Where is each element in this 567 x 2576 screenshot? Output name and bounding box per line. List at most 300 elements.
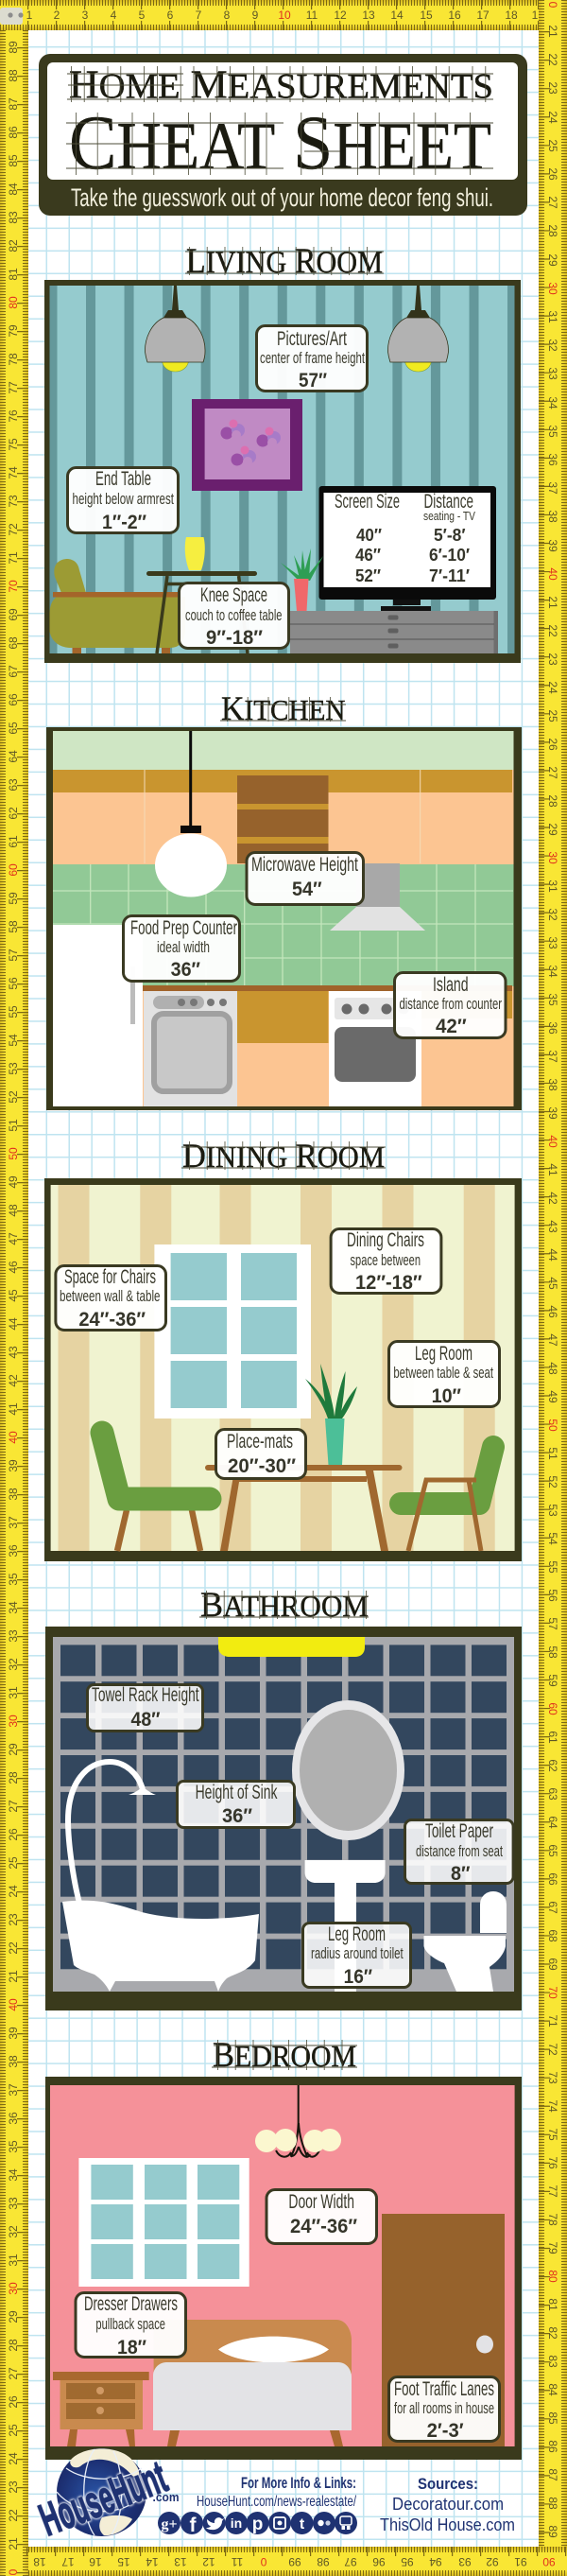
ruler: right: 28 bbox=[546, 794, 559, 808]
ruler: right: 23 bbox=[546, 653, 559, 666]
callout: place-mats: Place-mats bbox=[227, 1431, 293, 1453]
callout: height of sink bbox=[178, 1782, 295, 1827]
ruler: left: 28 bbox=[7, 2339, 20, 2352]
ruler: right: 40 bbox=[546, 1135, 559, 1148]
text: sources: Decoratour.com bbox=[392, 2495, 504, 2514]
ruler: right: 37 bbox=[546, 1050, 559, 1063]
callout: toilet paper: Toilet Paper bbox=[425, 1820, 493, 1842]
callout: space for chairs: Space for Chairs bbox=[64, 1266, 156, 1288]
ruler: top: 1 bbox=[26, 9, 33, 22]
callout: microwave height: Microwave Height bbox=[251, 854, 358, 876]
ruler: right: 21 bbox=[546, 596, 559, 609]
tv with screen size table: 40″ bbox=[356, 526, 382, 545]
ruler: top: 12 bbox=[334, 9, 347, 22]
ruler: left: 46 bbox=[7, 1261, 20, 1274]
sink bbox=[305, 1860, 386, 1992]
ruler: right: 41 bbox=[546, 1163, 559, 1176]
ruler: bottom: 93 bbox=[458, 2555, 472, 2568]
callout: dresser drawers: pullback space bbox=[95, 2315, 165, 2333]
ruler: left: 42 bbox=[7, 1374, 20, 1387]
ruler: left: 89 bbox=[7, 41, 20, 54]
ruler: left: 68 bbox=[7, 636, 20, 650]
ruler: left: 79 bbox=[7, 324, 20, 338]
title banner bbox=[39, 54, 527, 216]
icon: twitter bbox=[202, 2512, 225, 2534]
callout: food prep counter bbox=[123, 915, 240, 982]
ruler: right: 30 bbox=[546, 851, 559, 864]
callout: island: Island bbox=[433, 974, 469, 996]
ruler: left: 80 bbox=[7, 296, 20, 309]
ruler: right: 38 bbox=[546, 510, 559, 523]
callout: knee space bbox=[180, 583, 289, 649]
callout: knee space: 9″-18″ bbox=[206, 627, 263, 649]
ruler: right: 0 bbox=[546, 2, 559, 9]
callout: towel rack height bbox=[87, 1684, 202, 1731]
title: Cheat Sheet: CHEAT SHEET bbox=[69, 99, 491, 185]
tv with screen size table: 7′-11′ bbox=[429, 566, 470, 585]
ruler: right: 33 bbox=[546, 367, 559, 380]
callout: door width: Door Width bbox=[288, 2191, 354, 2213]
ruler: left: 59 bbox=[7, 892, 20, 905]
ruler: right: 35 bbox=[546, 993, 559, 1006]
logo: HouseHunt globe bbox=[33, 2448, 180, 2546]
ruler: left: 76 bbox=[7, 409, 20, 423]
callout: end table: End Table bbox=[95, 468, 151, 490]
ruler: left: 37 bbox=[7, 1516, 20, 1529]
ruler: top: 18 bbox=[505, 9, 518, 22]
ruler: left: 35 bbox=[7, 1573, 20, 1586]
ruler: right: 22 bbox=[546, 624, 559, 637]
ruler: left: 67 bbox=[7, 665, 20, 678]
mirror bbox=[292, 1700, 404, 1840]
icon: facebook: f bbox=[189, 2515, 197, 2536]
ruler: right: 42 bbox=[546, 1192, 559, 1205]
callout: door width bbox=[266, 2190, 376, 2243]
ruler: top: 13 bbox=[362, 9, 375, 22]
ruler: left: 47 bbox=[7, 1232, 20, 1245]
right chair bbox=[401, 1447, 493, 1551]
ruler: right: 81 bbox=[546, 2298, 559, 2311]
ruler: bottom: 16 bbox=[89, 2555, 102, 2568]
callout: island: distance from counter bbox=[399, 995, 502, 1013]
ruler: top: 17 bbox=[476, 9, 490, 22]
callout: toilet paper: distance from seat bbox=[416, 1842, 503, 1860]
callout: end table: height below armrest bbox=[72, 490, 174, 508]
ruler: right: 68 bbox=[546, 1929, 559, 1942]
ceiling light bbox=[218, 1637, 365, 1657]
ruler: top: 6 bbox=[167, 9, 174, 22]
ruler: left: 60 bbox=[7, 863, 20, 877]
tv with screen size table: seating - TV bbox=[423, 509, 475, 523]
ruler: right: 45 bbox=[546, 1277, 559, 1290]
ruler: left: 85 bbox=[7, 154, 20, 167]
ruler: bottom: 11 bbox=[231, 2555, 243, 2568]
ruler: left: 83 bbox=[7, 211, 20, 224]
ruler: right: 34 bbox=[546, 965, 559, 978]
range hood bbox=[330, 863, 425, 931]
ruler: right: 57 bbox=[546, 1617, 559, 1630]
ruler: left: 55 bbox=[7, 1005, 20, 1018]
ruler: right: 72 bbox=[546, 2043, 559, 2056]
ruler: left: 25 bbox=[7, 2424, 20, 2437]
ruler: left: 36 bbox=[7, 2112, 20, 2125]
ruler: left: 32 bbox=[7, 1658, 20, 1671]
ruler: right: 49 bbox=[546, 1390, 559, 1403]
wordmark: .com: .com bbox=[153, 2490, 180, 2504]
callout: leg room: Leg Room bbox=[415, 1343, 472, 1365]
ruler: right: 39 bbox=[546, 1106, 559, 1120]
tv with screen size table: 46″ bbox=[355, 546, 381, 565]
icon: myspace bbox=[335, 2512, 357, 2534]
ruler: right: 26 bbox=[546, 167, 559, 181]
ruler: bottom: 94 bbox=[429, 2555, 442, 2568]
callout: pictures/art: Pictures/Art bbox=[277, 328, 347, 350]
ruler: right: 66 bbox=[546, 1872, 559, 1886]
ruler: right: 63 bbox=[546, 1787, 559, 1801]
ruler: top: 16 bbox=[448, 9, 461, 22]
callout: dresser drawers bbox=[76, 2292, 185, 2358]
ruler: right: 26 bbox=[546, 738, 559, 751]
ruler: right: 34 bbox=[546, 396, 559, 409]
icon: tumblr: t bbox=[300, 2516, 305, 2532]
stove bbox=[329, 991, 421, 1106]
ruler: top: 9 bbox=[252, 9, 259, 22]
ruler: left: 23 bbox=[7, 1913, 20, 1926]
ruler: left: 30 bbox=[7, 1714, 20, 1728]
panel: bathroom bbox=[45, 1627, 522, 2010]
callout: foot traffic lanes: 2′-3′ bbox=[427, 2420, 464, 2442]
callout: place-mats bbox=[215, 1430, 306, 1479]
ruler: left: 51 bbox=[7, 1119, 20, 1132]
ruler: left: 50 bbox=[7, 1147, 20, 1160]
panel: living room bbox=[44, 280, 521, 663]
callout: knee space: couch to coffee table bbox=[185, 606, 282, 624]
text: sources bbox=[380, 2475, 515, 2534]
left chair bbox=[102, 1433, 210, 1551]
heading: Living Room: LIVING ROOM bbox=[186, 242, 383, 281]
ruler: bottom: 92 bbox=[486, 2555, 499, 2568]
ruler: left: 25 bbox=[7, 1856, 20, 1870]
callout: food prep counter: Food Prep Counter bbox=[130, 917, 237, 939]
ruler: left: 0 bbox=[7, 2568, 20, 2575]
ruler: bottom: 12 bbox=[202, 2555, 215, 2568]
ruler: right: 33 bbox=[546, 936, 559, 949]
ruler: right: 80 bbox=[546, 2270, 559, 2283]
ruler: top: 2 bbox=[54, 9, 60, 22]
ruler: right: 43 bbox=[546, 1220, 559, 1233]
ruler: left: 70 bbox=[7, 580, 20, 593]
heading: Bedroom: BEDROOM bbox=[213, 2036, 356, 2075]
ruler: left: 54 bbox=[7, 1034, 20, 1047]
ruler: left: 81 bbox=[7, 268, 20, 281]
ruler: left: 71 bbox=[7, 551, 20, 565]
ruler: left: 34 bbox=[7, 1601, 20, 1614]
ruler: left: 65 bbox=[7, 722, 20, 735]
dining table bbox=[205, 1465, 403, 1551]
callout: end table: 1″-2″ bbox=[102, 512, 146, 533]
vase bbox=[185, 537, 205, 570]
callout: food prep counter: ideal width bbox=[157, 938, 210, 956]
ruler: left: 29 bbox=[7, 2310, 20, 2324]
tile backsplash bbox=[53, 864, 514, 986]
ruler: right: 44 bbox=[546, 1248, 559, 1262]
callout: microwave height: 54″ bbox=[292, 879, 322, 900]
ruler: left: 58 bbox=[7, 920, 20, 933]
coffee table bbox=[146, 571, 257, 653]
ruler: right: 37 bbox=[546, 481, 559, 495]
icon: facebook bbox=[180, 2512, 203, 2536]
ruler: left: 36 bbox=[7, 1544, 20, 1558]
ruler: right: 30 bbox=[546, 282, 559, 295]
tv with screen size table: Distance bbox=[423, 491, 473, 513]
icon: tumblr bbox=[291, 2512, 314, 2534]
callout: dining chairs: space between bbox=[350, 1251, 421, 1269]
ruler: left: 24 bbox=[7, 1885, 20, 1898]
wall cabinet with shelves bbox=[237, 775, 329, 863]
ruler: left: 43 bbox=[7, 1346, 20, 1359]
window bbox=[78, 2158, 249, 2287]
callout: height of sink: 36″ bbox=[222, 1805, 252, 1827]
ruler: right: 24 bbox=[546, 111, 559, 124]
icon: pendant lamp right bbox=[387, 286, 449, 372]
callout: leg room: 10″ bbox=[432, 1385, 461, 1407]
callout: end table bbox=[68, 467, 178, 533]
ruler: right: 29 bbox=[546, 253, 559, 267]
ruler: right: 71 bbox=[546, 2014, 559, 2028]
ruler: left: 39 bbox=[7, 1459, 20, 1472]
text: more info and links: HouseHunt.com/news-realestate/ bbox=[197, 2494, 356, 2510]
callout: leg room: between table & seat bbox=[393, 1364, 493, 1382]
door bbox=[382, 2214, 505, 2446]
ruler: right: 48 bbox=[546, 1362, 559, 1375]
callout: island bbox=[395, 972, 506, 1038]
ruler: left: 31 bbox=[7, 2254, 20, 2267]
callout: knee space: Knee Space bbox=[200, 584, 267, 606]
ruler: right: 21 bbox=[546, 25, 559, 38]
ruler: left: 24 bbox=[7, 2452, 20, 2465]
ruler: left: 75 bbox=[7, 438, 20, 451]
ruler: right: 32 bbox=[546, 908, 559, 921]
ruler: left: 29 bbox=[7, 1743, 20, 1756]
icon: google plus bbox=[158, 2512, 180, 2534]
ruler: right: 77 bbox=[546, 2184, 559, 2198]
callout: towel rack height: 48″ bbox=[130, 1709, 161, 1731]
ruler: left: 62 bbox=[7, 807, 20, 820]
callout: leg room: radius around toilet bbox=[311, 1944, 404, 1962]
callout: dining chairs: Dining Chairs bbox=[347, 1229, 424, 1251]
panel: bedroom bbox=[45, 2077, 522, 2460]
title: Home Measurements: HOME MEASUREMENTS bbox=[69, 64, 493, 108]
ruler: right: 70 bbox=[546, 1986, 559, 1999]
ruler: bottom: 98 bbox=[317, 2555, 330, 2568]
tv with screen size table: 52″ bbox=[355, 566, 381, 585]
callout: space for chairs: between wall & table bbox=[60, 1287, 161, 1305]
ruler: top: 10 bbox=[278, 9, 291, 22]
icon: pinterest: p bbox=[252, 2515, 263, 2534]
ruler: right: 28 bbox=[546, 224, 559, 237]
ruler: bottom: 18 bbox=[33, 2555, 46, 2568]
callout: dresser drawers: 18″ bbox=[117, 2337, 146, 2358]
ruler: left: 33 bbox=[7, 1629, 20, 1643]
tv with screen size table: Screen Size bbox=[335, 491, 400, 513]
ruler: bottom: 95 bbox=[401, 2555, 414, 2568]
text: sources: Sources: bbox=[418, 2475, 478, 2493]
ruler: left: 27 bbox=[7, 2367, 20, 2380]
callout: door width: 24″-36″ bbox=[290, 2216, 357, 2237]
ruler: right: 54 bbox=[546, 1532, 559, 1545]
ruler: left bbox=[0, 30, 28, 2576]
callout: dresser drawers: Dresser Drawers bbox=[84, 2293, 178, 2315]
framed art bbox=[192, 399, 302, 491]
callout: foot traffic lanes bbox=[389, 2377, 499, 2442]
bed bbox=[153, 2320, 352, 2446]
ruler: right: 84 bbox=[546, 2383, 559, 2396]
icon: linkedin: in bbox=[231, 2515, 242, 2531]
ruler: right: 79 bbox=[546, 2241, 559, 2254]
ruler: right: 89 bbox=[546, 2525, 559, 2538]
icon: google plus: g+ bbox=[161, 2516, 178, 2532]
ruler: left: 21 bbox=[7, 1970, 20, 1983]
ruler: left: 48 bbox=[7, 1204, 20, 1217]
ruler: bottom bbox=[26, 2547, 567, 2576]
ruler: right: 67 bbox=[546, 1901, 559, 1914]
ruler: left: 77 bbox=[7, 381, 20, 394]
icon: pendant lamp left bbox=[145, 286, 205, 372]
ruler: left: 28 bbox=[7, 1771, 20, 1784]
ruler: left: 22 bbox=[7, 2509, 20, 2522]
ruler: right: 31 bbox=[546, 310, 559, 323]
ruler: right: 87 bbox=[546, 2468, 559, 2481]
text: more info and links bbox=[197, 2474, 356, 2510]
callout: foot traffic lanes: for all rooms in house bbox=[394, 2399, 494, 2417]
callout: toilet paper: 8″ bbox=[451, 1863, 471, 1885]
ruler: right: 59 bbox=[546, 1674, 559, 1687]
ruler: top: 11 bbox=[306, 9, 318, 22]
ruler: left: 63 bbox=[7, 778, 20, 792]
ruler: right: 35 bbox=[546, 425, 559, 438]
callout: dining chairs: 12″-18″ bbox=[355, 1272, 422, 1294]
ruler: left: 26 bbox=[7, 2395, 20, 2409]
ruler: right: 75 bbox=[546, 2128, 559, 2141]
ruler: right: 83 bbox=[546, 2355, 559, 2368]
ruler: right: 47 bbox=[546, 1333, 559, 1347]
ruler: left: 35 bbox=[7, 2140, 20, 2153]
callout: towel rack height: Towel Rack Height bbox=[92, 1684, 199, 1706]
tv console bbox=[290, 611, 498, 653]
ruler: left: 88 bbox=[7, 69, 20, 82]
ruler: right: 23 bbox=[546, 81, 559, 95]
icon: instagram bbox=[268, 2512, 291, 2534]
ruler: right: 56 bbox=[546, 1589, 559, 1602]
bathtub and shower bbox=[62, 1762, 259, 1992]
ruler: left: 69 bbox=[7, 608, 20, 621]
ruler: left: 23 bbox=[7, 2480, 20, 2494]
ruler: bottom: 97 bbox=[344, 2555, 357, 2568]
ruler: left: 38 bbox=[7, 2055, 20, 2068]
ruler: top: 14 bbox=[390, 9, 404, 22]
icon: chandelier bbox=[255, 2085, 341, 2157]
ruler: left: 53 bbox=[7, 1062, 20, 1075]
ruler: top: 5 bbox=[139, 9, 146, 22]
icon: potted plant bbox=[281, 548, 323, 611]
ruler: left: 33 bbox=[7, 2197, 20, 2210]
ruler: left: 31 bbox=[7, 1686, 20, 1699]
ruler: top: 4 bbox=[111, 9, 117, 22]
lower cabinets bbox=[237, 991, 512, 1043]
ruler: left: 22 bbox=[7, 1941, 20, 1955]
ruler: left: 21 bbox=[7, 2537, 20, 2550]
ruler: left: 41 bbox=[7, 1402, 20, 1416]
ruler: right: 64 bbox=[546, 1816, 559, 1829]
tv with screen size table bbox=[319, 486, 496, 611]
ruler: bottom: 14 bbox=[146, 2555, 159, 2568]
callout: pictures/art: center of frame height bbox=[260, 349, 365, 367]
ruler: right: 86 bbox=[546, 2440, 559, 2453]
callout: leg room bbox=[302, 1923, 410, 1988]
callout: pictures/art bbox=[257, 325, 367, 392]
heading: Bathroom: BATHROOM bbox=[200, 1586, 369, 1625]
ruler: bottom: 96 bbox=[372, 2555, 386, 2568]
ruler: right: 78 bbox=[546, 2213, 559, 2226]
ruler: top: 8 bbox=[224, 9, 231, 22]
ruler: right: 46 bbox=[546, 1305, 559, 1318]
heading: Kitchen: KITCHEN bbox=[221, 689, 346, 727]
ruler: left: 84 bbox=[7, 183, 20, 196]
callout: leg room: 16″ bbox=[344, 1966, 372, 1988]
ruler: left: 64 bbox=[7, 750, 20, 763]
ruler: right: 82 bbox=[546, 2326, 559, 2340]
wordmark: HouseHunt: HouseHunt bbox=[33, 2452, 174, 2546]
nightstand bbox=[53, 2372, 149, 2446]
ruler: top: 15 bbox=[420, 9, 433, 22]
ruler: left: 37 bbox=[7, 2083, 20, 2097]
window bbox=[154, 1244, 311, 1419]
ruler: top: 1 bbox=[532, 9, 539, 22]
ruler: bottom: 90 bbox=[542, 2555, 556, 2568]
ruler: left: 26 bbox=[7, 1828, 20, 1841]
ruler: bottom: 0 bbox=[260, 2555, 266, 2568]
ruler: left: 39 bbox=[7, 2027, 20, 2040]
ruler: right: 65 bbox=[546, 1844, 559, 1857]
ruler: right: 61 bbox=[546, 1731, 559, 1744]
callout: food prep counter: 36″ bbox=[171, 959, 200, 981]
pendant globe bbox=[155, 731, 227, 896]
callout: toilet paper bbox=[404, 1819, 513, 1885]
ruler: left: 34 bbox=[7, 2168, 20, 2182]
ruler: left: 30 bbox=[7, 2282, 20, 2295]
ruler: bottom: 13 bbox=[174, 2555, 187, 2568]
callout: pictures/art: 57″ bbox=[299, 370, 327, 392]
ruler: right: 62 bbox=[546, 1759, 559, 1772]
ruler: top bbox=[0, 0, 539, 30]
text: sources: ThisOld House.com bbox=[380, 2515, 515, 2534]
ruler: left: 74 bbox=[7, 466, 20, 479]
icon: flickr bbox=[313, 2512, 335, 2534]
ruler: right bbox=[539, 0, 567, 2547]
ruler: right: 74 bbox=[546, 2099, 559, 2113]
ruler: left: 72 bbox=[7, 523, 20, 536]
icon: globe bbox=[57, 2448, 146, 2536]
icon: plant in vase bbox=[305, 1364, 357, 1465]
ruler: right: 76 bbox=[546, 2156, 559, 2169]
ruler: right: 36 bbox=[546, 1021, 559, 1035]
callout: place-mats: 20″-30″ bbox=[228, 1455, 296, 1477]
ruler: right: 40 bbox=[546, 567, 559, 581]
text: more info and links: For More Info & Links: bbox=[241, 2474, 356, 2492]
tv with screen size table: 5′-8′ bbox=[434, 526, 465, 545]
social icons bbox=[158, 2512, 357, 2536]
ruler: bottom: 17 bbox=[61, 2555, 75, 2568]
